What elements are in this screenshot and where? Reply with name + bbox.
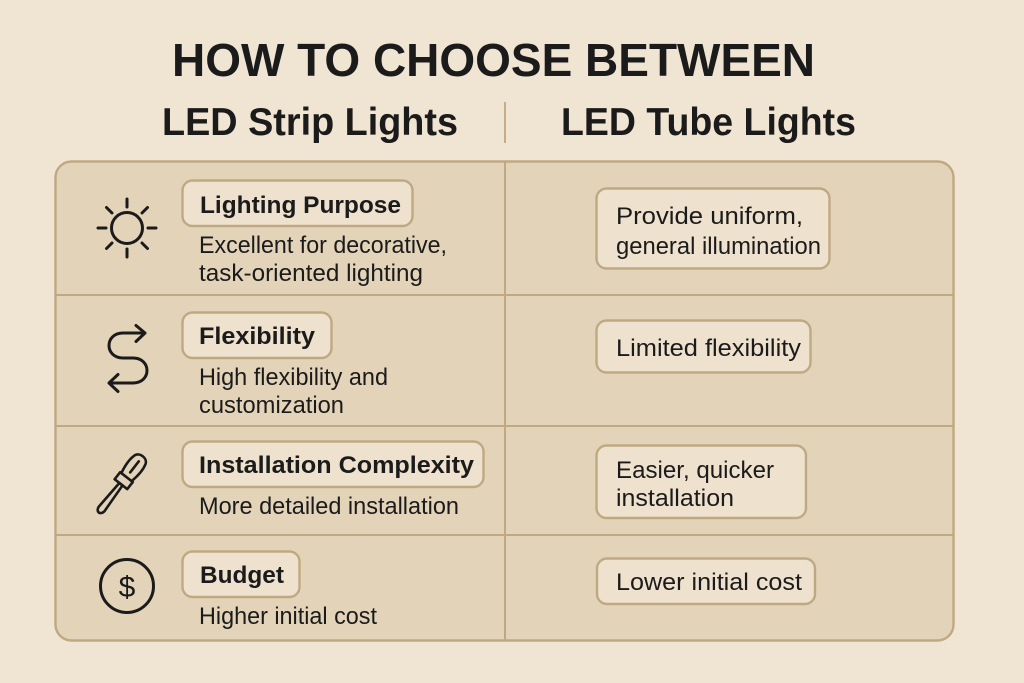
text: strip flexibility: High flexibility and [199, 364, 388, 391]
icon: dollar coin: $ [119, 571, 136, 604]
badge: Installation Complexity [182, 442, 484, 487]
icon: dollar coin [100, 560, 154, 612]
text: strip flexibility [199, 364, 388, 419]
row: Flexibility [109, 312, 810, 419]
row: Lighting Purpose [98, 180, 830, 287]
badge: Budget: Budget [200, 562, 284, 589]
callout: tube installation [596, 446, 806, 518]
badge: Lighting Purpose: Lighting Purpose [200, 192, 401, 219]
icon: screwdriver [92, 451, 149, 517]
column heading: LED Strip Lights: LED Strip Lights [162, 101, 458, 144]
icon: S-shaped arrows [109, 326, 147, 392]
callout: tube budget [597, 558, 815, 604]
text: strip budget: Higher initial cost [199, 603, 377, 630]
text: strip lighting purpose [199, 232, 447, 287]
text: strip lighting purpose: Excellent for decorative, [199, 232, 447, 259]
badge: Budget [182, 552, 300, 597]
title: HOW TO CHOOSE BETWEEN [172, 34, 815, 86]
row: Budget [100, 552, 815, 630]
callout: tube budget: Lower initial cost [616, 569, 802, 596]
callout: tube lighting purpose [596, 188, 830, 268]
badge: Flexibility [182, 312, 332, 358]
callout: tube lighting purpose: general illumination [616, 233, 821, 260]
text: strip lighting purpose: task-oriented lighting [199, 260, 423, 287]
row: Installation Complexity [92, 442, 806, 520]
badge: Flexibility: Flexibility [199, 323, 315, 350]
text: strip installation: More detailed installation [199, 493, 459, 520]
icon: sun [98, 199, 156, 257]
callout: tube flexibility [596, 320, 810, 372]
callout: tube installation: Easier, quicker [616, 457, 774, 484]
panel: comparison table [56, 162, 954, 640]
column heading: LED Tube Lights: LED Tube Lights [561, 101, 856, 144]
badge: Lighting Purpose [182, 180, 412, 226]
callout: tube installation: installation [616, 485, 734, 512]
badge: Installation Complexity: Installation Complexity [199, 452, 474, 479]
callout: tube flexibility: Limited flexibility [616, 335, 802, 362]
text: strip flexibility: customization [199, 392, 344, 419]
callout: tube lighting purpose: Provide uniform, [616, 203, 803, 230]
